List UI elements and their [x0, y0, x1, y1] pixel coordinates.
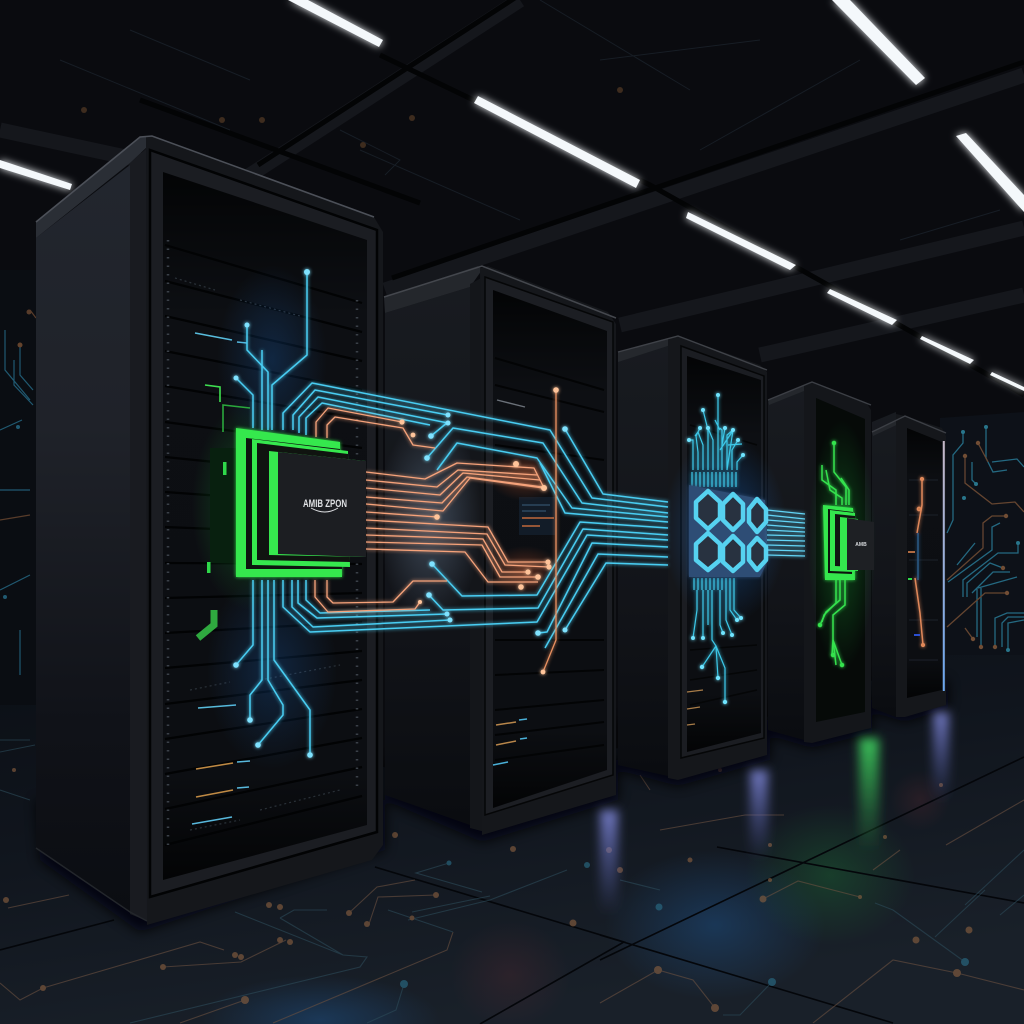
- hexagon cells: [696, 491, 766, 571]
- orange circuit traces from main chip: [315, 390, 556, 672]
- wall circuit traces right: [947, 425, 1024, 652]
- rack 2 server rows: [495, 358, 604, 760]
- server rack 4: [768, 382, 876, 743]
- hexagon processor: [689, 485, 768, 577]
- rack 3 lower tree traces: [687, 393, 745, 704]
- rack 2 edge light: [607, 335, 609, 770]
- rack 5 traces: [915, 478, 924, 646]
- floor: [0, 655, 1024, 1024]
- main green chip: [236, 428, 366, 577]
- orange trace end dots: [399, 387, 559, 674]
- rack 3 side: [618, 338, 668, 776]
- trace haze on rack 2 side: [378, 415, 482, 625]
- rack 5 edge light: [943, 441, 945, 691]
- rack 4 chip glow: [808, 420, 876, 670]
- back wall left: [0, 270, 40, 705]
- rack 3 upper tree traces: [689, 395, 743, 487]
- rack 1 status lights: [192, 333, 250, 824]
- server rack 3: [618, 336, 805, 780]
- rack 5 side: [872, 412, 896, 717]
- ceiling beams and panel traces: [0, 0, 1024, 395]
- rack 5 status lights: [908, 552, 920, 635]
- rack 1 door: [146, 136, 383, 925]
- server rack 2: [378, 266, 616, 835]
- chip face: [278, 452, 366, 557]
- rack 5 door: [896, 414, 946, 717]
- rack 4 chip logo: AMB: [855, 542, 867, 548]
- blue trace end dots: [233, 269, 568, 758]
- output bus to rack 4: [767, 510, 805, 556]
- rack 1 side panel: [36, 165, 130, 912]
- rack floor shadows: [36, 680, 948, 932]
- server rack 5: [872, 412, 946, 717]
- floor reflections: [600, 712, 949, 915]
- green board behind chip: [192, 385, 308, 638]
- ceiling lights: [0, 0, 1024, 391]
- rack 4 chip face: [847, 518, 874, 570]
- rack 4 door: [804, 382, 871, 743]
- chip logo: AMIB ZPON: [303, 498, 347, 510]
- blue circuit traces from main chip: [236, 272, 668, 755]
- rack 4 green traces: [818, 442, 849, 666]
- chip logo: [303, 498, 347, 512]
- back wall right: [940, 412, 1024, 660]
- rack 4 green chip: [823, 505, 874, 580]
- rack 3 server rows: [690, 425, 757, 705]
- rack 2 door: [480, 266, 616, 835]
- rack 4 edge light: [866, 420, 868, 707]
- rack 1 post: [130, 148, 147, 921]
- floor tiles and traces: [0, 740, 1024, 1024]
- rack 1 server rows: [165, 245, 362, 845]
- rack 2 side: [385, 287, 470, 825]
- rack 2 post: [470, 276, 485, 832]
- floor colour patches: [200, 770, 950, 1024]
- wall circuit traces left: [0, 310, 36, 675]
- rack 3 door: [668, 336, 767, 780]
- rack 1 top cap: [36, 137, 147, 238]
- rack 1 trace halo: [217, 265, 327, 455]
- rack 3 edge light: [760, 392, 762, 733]
- rack 3 chip glow: [663, 435, 787, 625]
- server rack 1: [36, 136, 383, 925]
- orange glow on rack 2 glass: [487, 449, 563, 501]
- rack 4 side: [768, 388, 804, 740]
- rack 2 display: [519, 497, 555, 535]
- rack 3 status lights: [687, 690, 703, 725]
- rack 2 status lights: [493, 719, 527, 765]
